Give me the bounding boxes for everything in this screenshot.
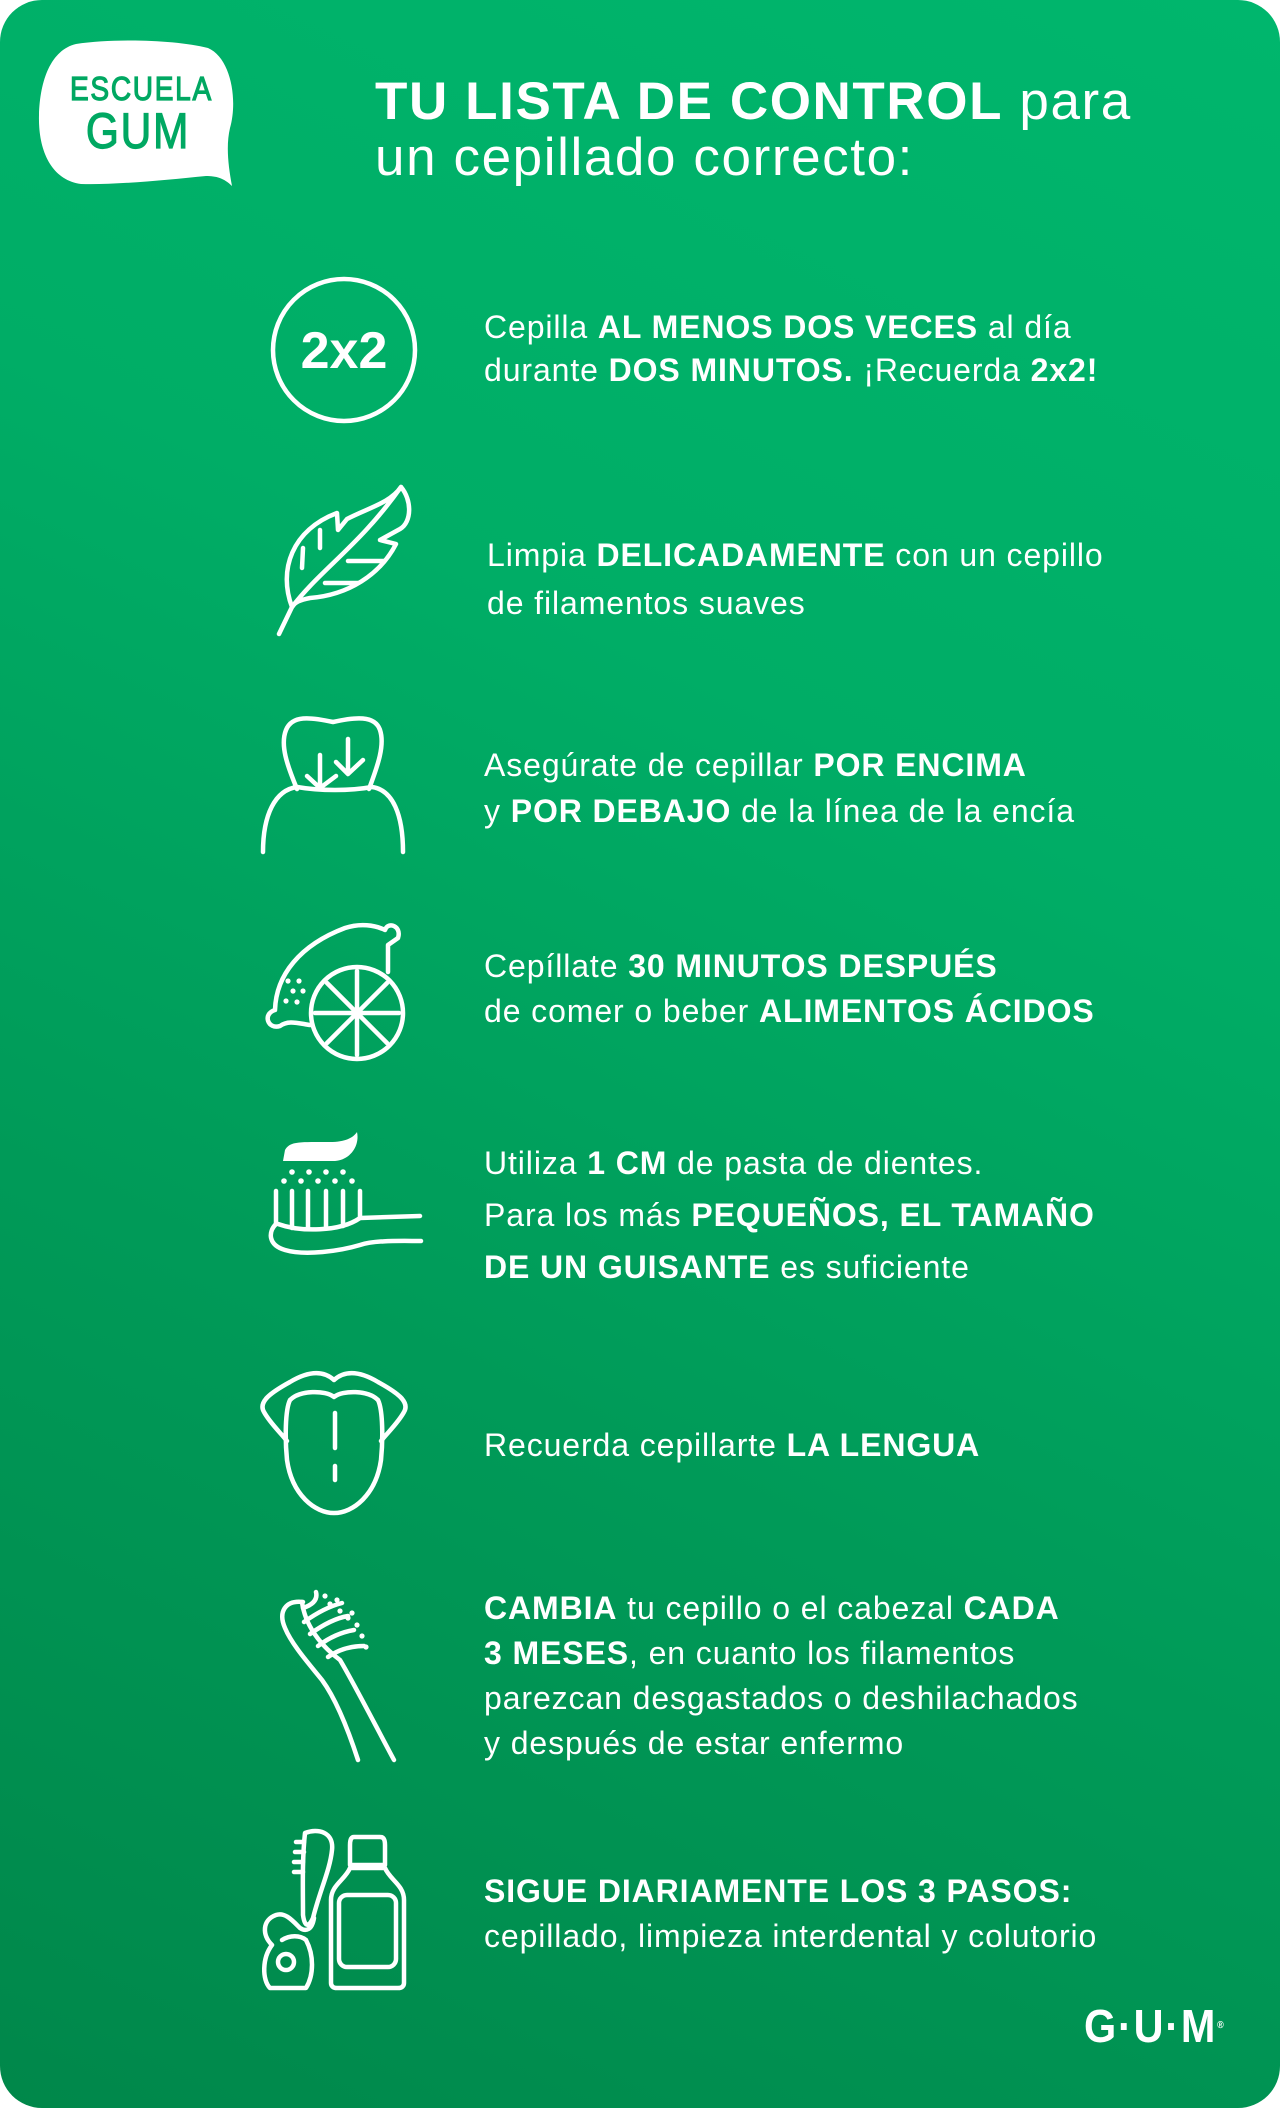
text: row 2: de filamentos suaves bbox=[487, 585, 806, 621]
logo: Escuela GUM speech bubble bbox=[38, 40, 234, 186]
text: row 8: SIGUE DIARIAMENTE LOS 3 PASOS: bbox=[484, 1873, 1072, 1909]
text: row 2 bbox=[487, 537, 1104, 621]
text: row 7 bbox=[484, 1590, 1079, 1761]
text: row 2: Limpia DELICADAMENTE con un cepillo bbox=[487, 537, 1104, 573]
text: row 3: y POR DEBAJO de la línea de la encía bbox=[484, 793, 1075, 829]
text: row 8 bbox=[484, 1873, 1097, 1954]
text: row 3 bbox=[484, 747, 1075, 829]
logo: GUM: G·U·M® bbox=[1084, 2000, 1226, 2052]
text: row 4: Cepíllate 30 MINUTOS DESPUÉS bbox=[484, 948, 998, 984]
icon: 2x2 circle: 2x2 bbox=[301, 322, 387, 380]
icon: brush, floss and mouthwash bbox=[264, 1831, 404, 1988]
text: row 5: DE UN GUISANTE es suficiente bbox=[484, 1249, 970, 1285]
text: row 5 bbox=[484, 1145, 1095, 1285]
text: row 5: Utiliza 1 CM de pasta de dientes. bbox=[484, 1145, 983, 1181]
logo: Escuela GUM speech bubble: GUM bbox=[86, 103, 190, 159]
icon: lemon bbox=[268, 925, 403, 1059]
text: row 1: Cepilla AL MENOS DOS VECES al día bbox=[484, 309, 1072, 345]
logo: Escuela GUM speech bubble: ESCUELA bbox=[70, 70, 213, 107]
icon: 2x2 circle bbox=[273, 279, 415, 421]
icon: tooth with arrows bbox=[263, 718, 403, 852]
icon: toothbrush with paste bbox=[271, 1132, 421, 1253]
text: row 6: Recuerda cepillarte LA LENGUA bbox=[484, 1427, 980, 1463]
text: row 7: y después de estar enfermo bbox=[484, 1725, 904, 1761]
text: row 4 bbox=[484, 948, 1095, 1029]
icon: worn toothbrush bbox=[282, 1592, 394, 1760]
title: un cepillado correcto: bbox=[375, 128, 914, 187]
text: row 1 bbox=[484, 309, 1098, 388]
text: row 7: CAMBIA tu cepillo o el cabezal CADA bbox=[484, 1590, 1060, 1626]
text: row 8: cepillado, limpieza interdental y colutorio bbox=[484, 1918, 1097, 1954]
text: row 3: Asegúrate de cepillar POR ENCIMA bbox=[484, 747, 1027, 783]
text: row 5: Para los más PEQUEÑOS, EL TAMAÑO bbox=[484, 1197, 1095, 1233]
text: row 4: de comer o beber ALIMENTOS ÁCIDOS bbox=[484, 993, 1095, 1029]
title: TU LISTA DE CONTROL para bbox=[375, 72, 1132, 131]
title bbox=[375, 72, 1132, 187]
icon: tongue bbox=[262, 1373, 406, 1513]
icon: leaf bbox=[279, 487, 409, 634]
text: row 1: durante DOS MINUTOS. ¡Recuerda 2x2! bbox=[484, 352, 1098, 388]
text: row 7: 3 MESES, en cuanto los filamentos bbox=[484, 1635, 1015, 1671]
text: row 7: parezcan desgastados o deshilachados bbox=[484, 1680, 1079, 1716]
